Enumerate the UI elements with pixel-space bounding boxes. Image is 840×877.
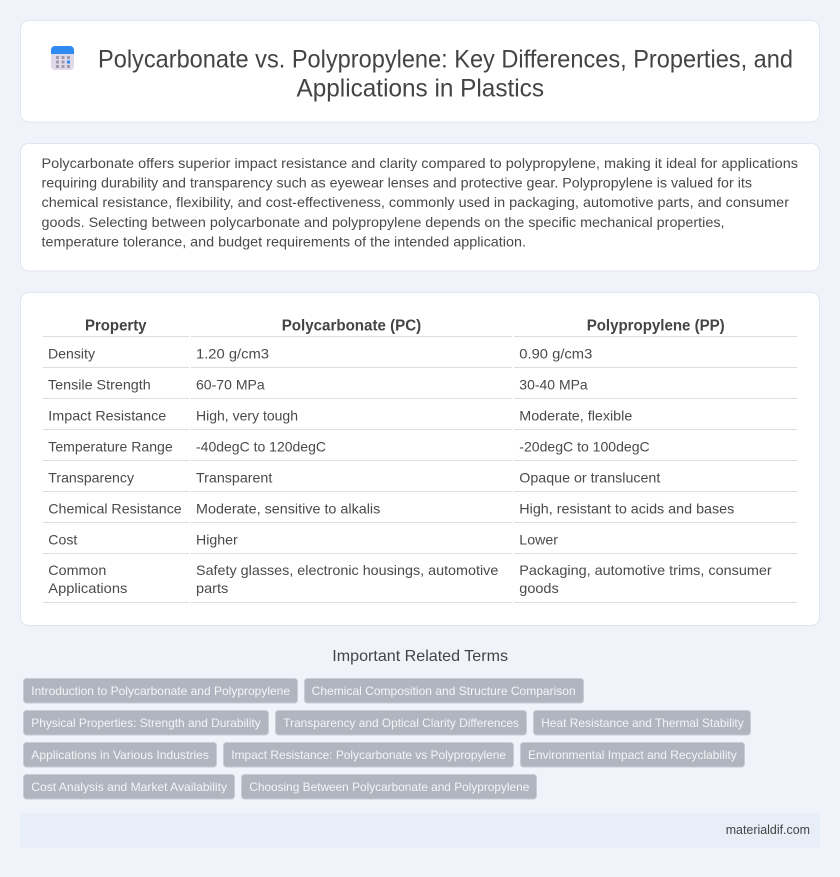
table header row: Polypropylene (PP) <box>587 318 725 334</box>
table row: chemical resistance <box>43 500 797 523</box>
table row: temperature range <box>43 438 797 461</box>
tag <box>24 774 234 799</box>
table row: tensile strength <box>43 376 797 399</box>
text block: summary paragraph: Polycarbonate offers superior impact resistance and clarity compared to polypropylene, making it ideal for applications <box>42 155 798 171</box>
icon: calendar grid <box>51 46 74 70</box>
tag <box>224 742 514 767</box>
tag <box>242 774 536 799</box>
tag: Heat Resistance and Thermal Stability <box>541 716 744 730</box>
table row: transparency: Transparency <box>48 469 134 485</box>
table row: impact resistance: Moderate, flexible <box>519 407 633 423</box>
table header row: Property <box>85 318 147 334</box>
tag: Environmental Impact and Recyclability <box>528 748 737 762</box>
table row: cost <box>43 531 797 554</box>
table row: impact resistance <box>43 407 797 430</box>
panel: introduction <box>20 144 820 271</box>
tag <box>520 742 744 767</box>
table row: common applications: Common <box>48 562 106 578</box>
panel: header <box>20 20 820 122</box>
title: Applications in Plastics <box>296 74 544 102</box>
table row: common applications: goods <box>519 580 559 596</box>
table row: density: 1.20 g/cm3 <box>196 345 269 361</box>
table row: chemical resistance: High, resistant to acids and bases <box>519 500 734 516</box>
text block: summary paragraph <box>42 155 798 249</box>
table row: transparency: Transparent <box>196 469 272 485</box>
tag: Physical Properties: Strength and Durability <box>31 716 261 730</box>
table row: chemical resistance: Chemical Resistance <box>48 500 182 516</box>
table row: impact resistance: High, very tough <box>196 407 298 423</box>
tag: Introduction to Polycarbonate and Polypropylene <box>31 684 290 698</box>
text block: summary paragraph: chemical resistance, flexibility, and cost-effectiveness, commonly used in packaging, automotive parts, and consumer <box>42 194 789 210</box>
heading: important related terms: Important Related Terms <box>332 648 508 665</box>
tag <box>24 678 298 703</box>
table row: tensile strength: 60-70 MPa <box>196 376 265 392</box>
tag <box>534 710 750 735</box>
table row: impact resistance: Impact Resistance <box>48 407 167 423</box>
footer <box>20 813 820 848</box>
table row: transparency <box>43 469 797 492</box>
tag: Impact Resistance: Polycarbonate vs Polypropylene <box>231 748 506 762</box>
table row: density: Density <box>48 345 95 361</box>
footer: materialdif.com <box>726 822 810 837</box>
text block: summary paragraph: requiring durability and transparency such as eyewear lenses and protective gear. Polypropylene is valued for its <box>42 175 752 191</box>
tag: Cost Analysis and Market Availability <box>31 780 227 794</box>
table row: common applications: Packaging, automotive trims, consumer <box>519 562 772 578</box>
table row: common applications: Safety glasses, electronic housings, automotive <box>196 562 499 578</box>
table row: tensile strength: 30-40 MPa <box>519 376 588 392</box>
table row: cost: Lower <box>519 531 558 547</box>
tag: Chemical Composition and Structure Comparison <box>312 684 576 698</box>
tag <box>24 710 268 735</box>
tag <box>304 678 584 703</box>
table row: transparency: Opaque or translucent <box>519 469 660 485</box>
title <box>98 46 793 102</box>
tag: Choosing Between Polycarbonate and Polypropylene <box>249 780 530 794</box>
panel: comparison table <box>20 292 820 626</box>
table header row <box>43 318 797 337</box>
table row: common applications: Applications <box>48 580 127 596</box>
table row: temperature range: -20degC to 100degC <box>519 438 650 454</box>
table row: density <box>43 345 797 368</box>
title: Polycarbonate vs. Polypropylene: Key Differences, Properties, and <box>98 46 793 74</box>
table row: common applications: parts <box>196 580 228 596</box>
tag <box>24 742 216 767</box>
table row: cost: Cost <box>48 531 77 547</box>
table row: temperature range: -40degC to 120degC <box>196 438 326 454</box>
panel: related term tags <box>24 678 750 799</box>
table row: cost: Higher <box>196 531 238 547</box>
tag <box>276 710 526 735</box>
table row: density: 0.90 g/cm3 <box>519 345 593 361</box>
text block: summary paragraph: goods. Selecting between polycarbonate and polypropylene depends on the specific mechanical properties, <box>42 214 724 230</box>
text block: summary paragraph: temperature tolerance, and budget requirements of the intended application. <box>42 233 526 249</box>
table row: tensile strength: Tensile Strength <box>48 376 151 392</box>
table row: common applications <box>43 562 797 603</box>
table row: temperature range: Temperature Range <box>48 438 173 454</box>
table header row: Polycarbonate (PC) <box>282 318 421 334</box>
tag: Applications in Various Industries <box>31 748 209 762</box>
table row: chemical resistance: Moderate, sensitive to alkalis <box>196 500 380 516</box>
tag: Transparency and Optical Clarity Differences <box>283 716 519 730</box>
